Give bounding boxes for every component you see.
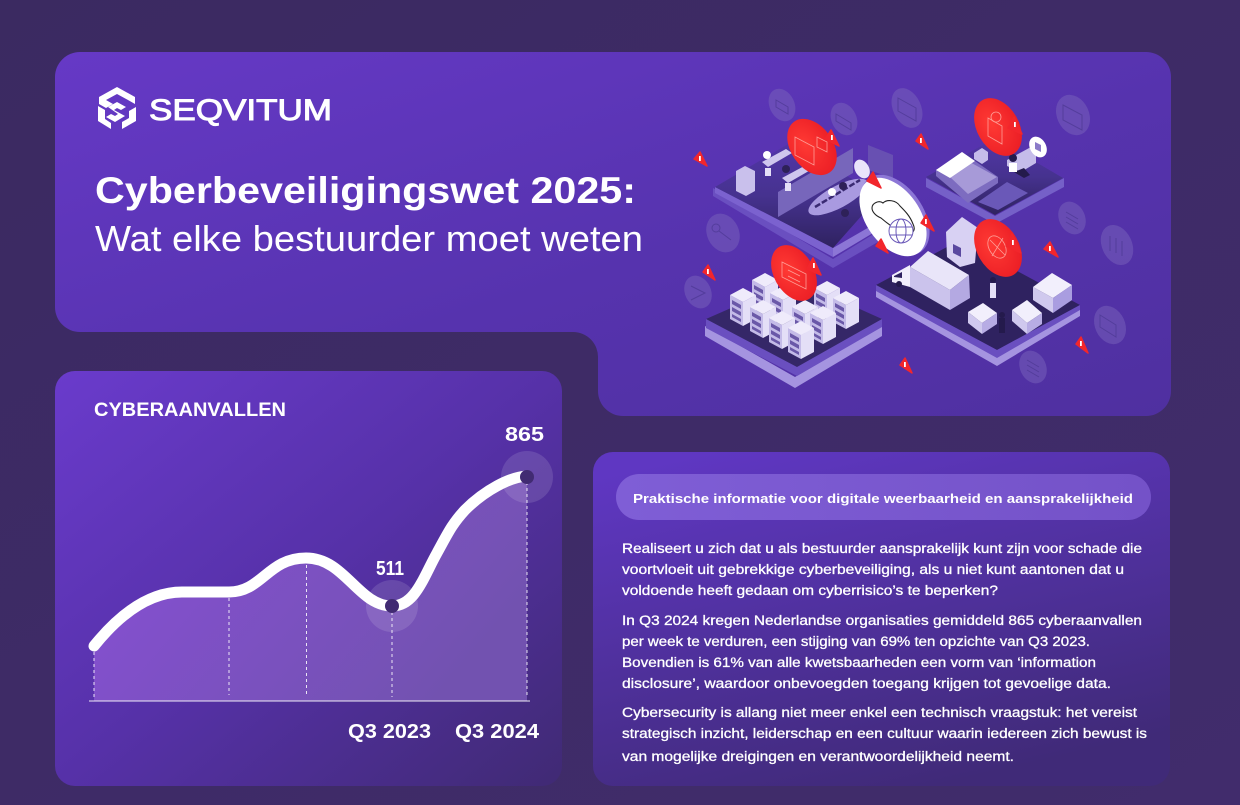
platform: office	[713, 143, 893, 268]
value labels	[348, 424, 544, 743]
title: Cyberbeveiligingswet 2025:	[95, 170, 636, 211]
text: paragraph 2: Bovendien is 61% van alle kwetsbaarheden een vorm van ‘information	[622, 655, 1096, 670]
text: paragraph 3: strategisch inzicht, leiderschap en een cultuur waarin iedereen zich bewust is	[622, 726, 1147, 741]
text: paragraph 1: voldoende heeft gedaan om cyberrisico’s te beperken?	[622, 583, 998, 598]
panel: cyberattacks chart	[55, 371, 562, 786]
text: paragraph 2: In Q3 2024 kregen Nederlandse organisaties gemiddeld 865 cyberaanvallen	[622, 613, 1142, 628]
text: paragraph 1: Realiseert u zich dat u als bestuurder aansprakelijk kunt zijn voor schade die	[622, 541, 1142, 556]
value labels: Q3 2024	[455, 721, 540, 743]
panel: practical information	[593, 452, 1170, 786]
text: paragraph 2: per week te verduren, een stijging van 69% ten opzichte van Q3 2023.	[622, 634, 1090, 649]
subheading pill	[616, 474, 1151, 520]
text: paragraph 1: voortvloeit uit gebrekkige cyberbeveiliging, als u niet kunt aantonen dat u	[622, 562, 1124, 577]
text: paragraph 1	[622, 541, 1142, 598]
icons: faded background bubbles	[679, 83, 1139, 388]
text: paragraph 3: van mogelijke dreigingen en verantwoordelijkheid neemt.	[622, 749, 1014, 764]
area under curve	[94, 476, 527, 701]
curve line	[94, 476, 527, 646]
icon: white cloud bubble	[846, 162, 944, 269]
platform: bedroom	[926, 133, 1064, 224]
title: Wat elke bestuurder moet weten	[95, 218, 643, 259]
logo: Seqvitum: SEQVITUM	[149, 94, 332, 127]
heading: Cyberaanvallen: CYBERAANVALLEN	[94, 400, 286, 421]
icons: red alert bubbles	[762, 90, 1032, 309]
value labels: 511	[376, 558, 404, 580]
text: paragraph 3: Cybersecurity is allang niet meer enkel een technisch vraagstuk: het vereist	[622, 705, 1137, 720]
text: paragraph 3	[622, 705, 1147, 764]
title	[95, 170, 643, 259]
platform: servers	[705, 273, 882, 388]
icons: red warning triangles	[694, 117, 1088, 373]
subheading pill: Praktische informatie voor digitale weerbaarheid en aansprakelijkheid	[633, 491, 1133, 506]
value labels: Q3 2023	[348, 721, 431, 743]
text: paragraph 2: disclosure’, waardoor onbevoegden toegang krijgen tot gevoelige data.	[622, 676, 1111, 691]
illustration: isometric cyber risks	[679, 83, 1139, 388]
line chart	[89, 424, 553, 743]
logo: Seqvitum	[98, 87, 332, 129]
platform: warehouse	[876, 217, 1080, 366]
value labels: 865	[505, 424, 544, 446]
panel: hero header	[55, 52, 1171, 416]
text: paragraph 2	[622, 613, 1142, 691]
